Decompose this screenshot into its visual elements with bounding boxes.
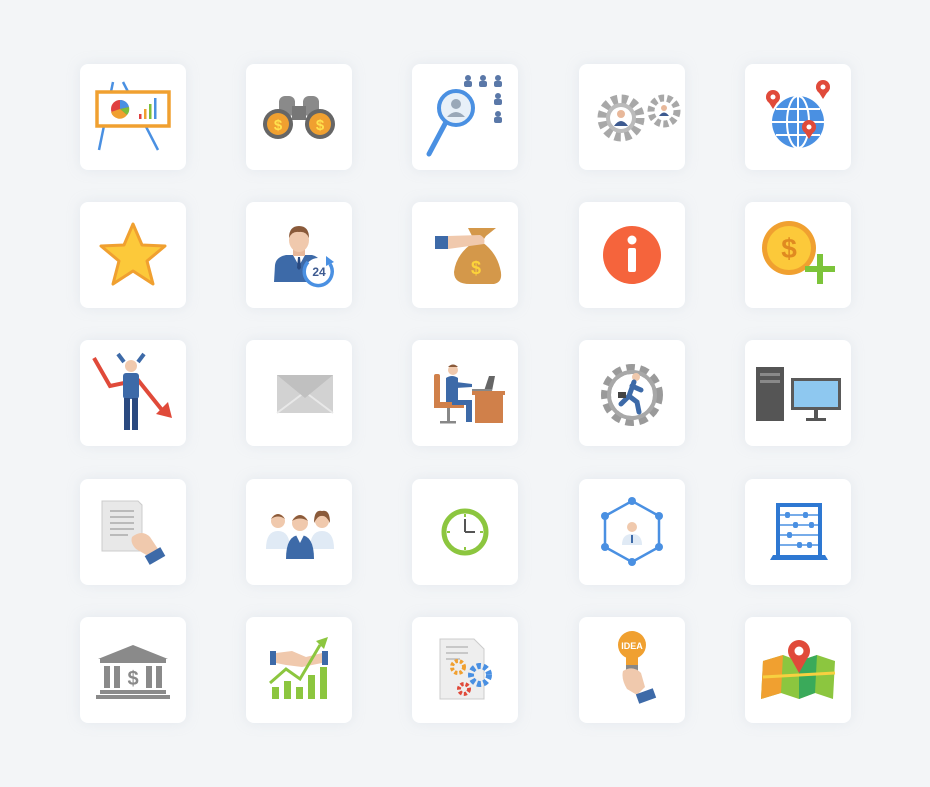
card: presentation easel xyxy=(80,64,186,170)
card: binoculars xyxy=(246,64,352,170)
card: binoculars: $ xyxy=(316,117,325,134)
card: idea bulb xyxy=(579,617,685,723)
card: handshake growth xyxy=(246,617,352,723)
card: globe with pins xyxy=(745,64,851,170)
card: stressed man falling arrow xyxy=(80,340,186,446)
card: document with hand xyxy=(80,479,186,585)
card: envelope xyxy=(246,340,352,446)
card: hand with money bag: $ xyxy=(471,258,481,278)
card: bank xyxy=(80,617,186,723)
card: star xyxy=(80,202,186,308)
card: map pin xyxy=(745,617,851,723)
card: businessman 24: 24 xyxy=(312,265,326,279)
card: computer xyxy=(745,340,851,446)
card: man at desk xyxy=(412,340,518,446)
card: hand with money bag xyxy=(412,202,518,308)
card: abacus xyxy=(745,479,851,585)
card: coin plus xyxy=(745,202,851,308)
card: info xyxy=(579,202,685,308)
card: binoculars: $ xyxy=(274,117,283,134)
card: gear running man xyxy=(579,340,685,446)
card: coin plus: $ xyxy=(781,233,797,264)
card: gears with people xyxy=(579,64,685,170)
card: idea bulb: IDEA xyxy=(621,641,643,651)
card: clock xyxy=(412,479,518,585)
card: magnifier with people xyxy=(412,64,518,170)
card: team xyxy=(246,479,352,585)
card: businessman 24 xyxy=(246,202,352,308)
card: bank: $ xyxy=(127,668,139,690)
card: document gears xyxy=(412,617,518,723)
card: hexagon network xyxy=(579,479,685,585)
